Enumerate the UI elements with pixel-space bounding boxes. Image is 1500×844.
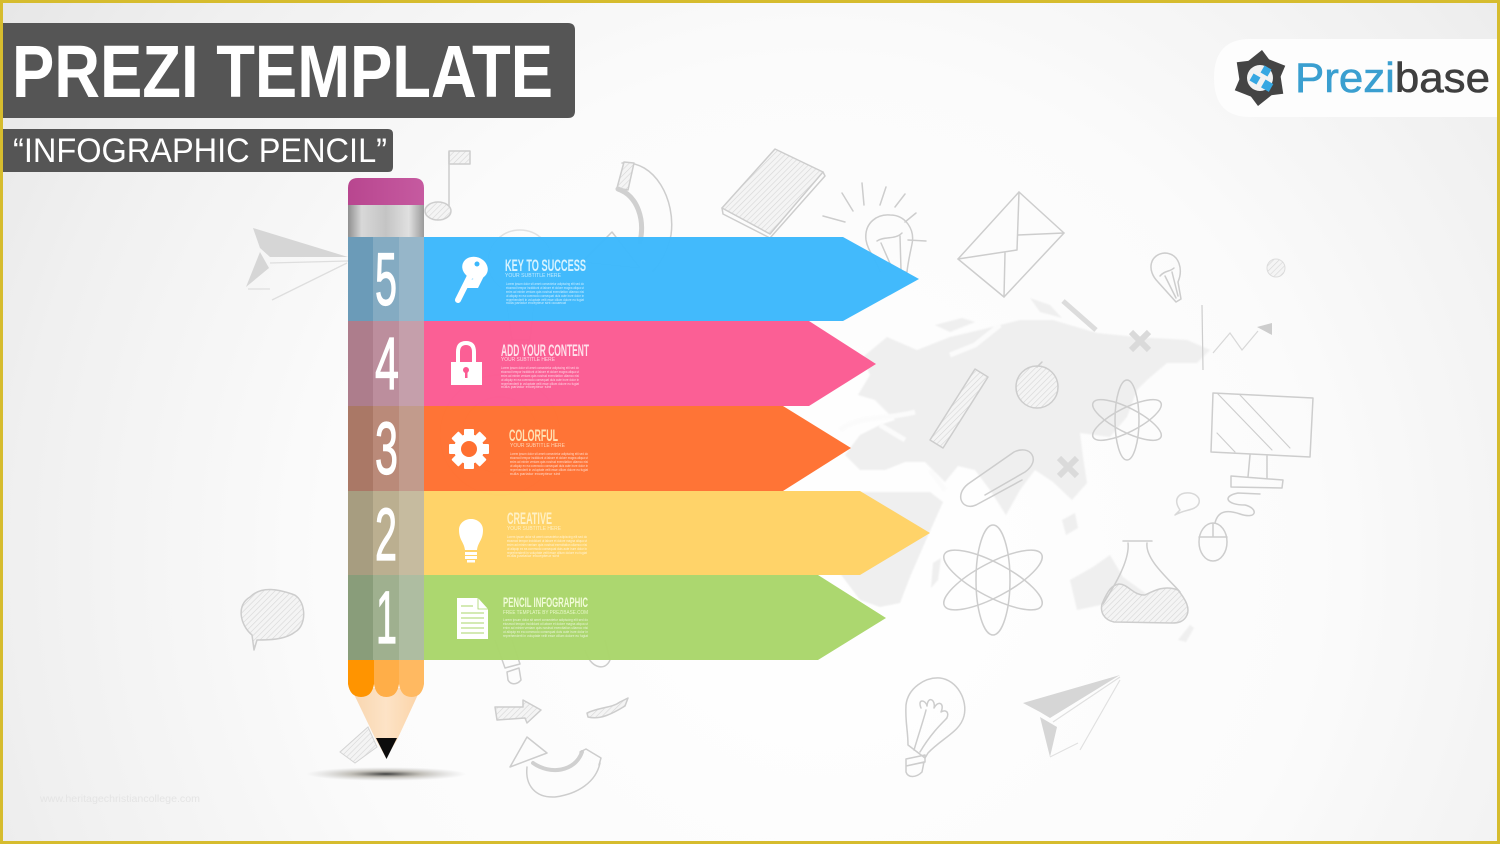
doodle: curved arrow bottom [510, 737, 601, 797]
doodle: mouse and speech bubble [1175, 493, 1260, 561]
doodle: curved arrow top [582, 162, 672, 272]
number 3: 3 [375, 407, 398, 490]
doodle: sketched lightbulb with rays [823, 183, 926, 272]
ribbon 3: colorful [424, 406, 851, 491]
title banner: PREZI TEMPLATE [12, 30, 553, 113]
doodle: large lightbulb [906, 678, 965, 776]
logo mark [1229, 50, 1291, 106]
icon: padlock [451, 343, 482, 385]
logo wordmark: Prezibase [1295, 54, 1490, 101]
ribbon 4: add your content [424, 321, 876, 406]
text block: key to success: nulla pariatur excepteur sint occaecat [506, 301, 566, 305]
pencil eraser [348, 178, 424, 205]
text block: key to success: enim ad minim veniam quis nostrud exercitation ullamco nisi [506, 290, 584, 294]
text block: creative: enim ad minim veniam quis nostrud exercitation ullamco nisi [507, 543, 587, 547]
text block: add your content: ut aliquip ex ea commodo consequat duis aute irure dolor in [501, 378, 579, 382]
number 4: 4 [375, 322, 399, 405]
text block: colorful: enim ad minim veniam quis nostrud exercitation ullamco nisi [510, 460, 588, 464]
icon: lightbulb [459, 519, 483, 562]
text: ADD YOUR CONTENT [501, 341, 589, 360]
text block: colorful: Lorem ipsum dolor sit amet consectetur adipiscing elit sed do [510, 452, 588, 456]
text block: colorful: YOUR SUBTITLE HERE [510, 443, 566, 449]
arrow ribbons [424, 237, 930, 660]
doodle: x marks [1059, 332, 1149, 476]
doodle: tiny apple [1267, 259, 1285, 277]
icon: document [457, 598, 488, 639]
text block: creative: YOUR SUBTITLE HERE [507, 526, 562, 532]
world map [800, 298, 1210, 642]
subtitle banner: “INFOGRAPHIC PENCIL” [13, 132, 387, 170]
doodle: flask [1102, 541, 1188, 623]
logo pill [1214, 39, 1500, 117]
text block: colorful: nulla pariatur excepteur sint [510, 472, 560, 476]
doodle: envelope [958, 192, 1064, 297]
ribbon 2: creative [424, 491, 930, 575]
text block: pencil infographic: enim ad minim veniam quis nostrud exercitation ullamco nisi [503, 626, 588, 630]
text block: creative: CREATIVE [507, 509, 552, 528]
text block: add your content: eiusmod tempor incididunt ut labore et dolore magna aliqua ut [501, 370, 579, 374]
doodle: sketches behind the ribbons [440, 230, 560, 495]
icon: gear [449, 429, 489, 469]
text block: key to success [505, 256, 586, 305]
doodle: apple [1016, 362, 1058, 408]
text block: pencil infographic [503, 594, 588, 638]
pencil band 1 [348, 575, 424, 660]
text block: creative: Lorem ipsum dolor sit amet consectetur adipiscing elit sed do [507, 535, 587, 539]
doodle: paperclip [961, 450, 1033, 506]
text block: colorful: ut aliquip ex ea commodo consequat duis aute irure dolor in [510, 464, 588, 468]
doodle: ruler [930, 369, 988, 448]
text block: pencil infographic: FREE TEMPLATE BY PREZIBASE.COM [503, 610, 588, 616]
text block: add your content: Lorem ipsum dolor sit amet consectetur adipiscing elit sed do [501, 366, 579, 370]
text block: key to success: KEY TO SUCCESS [505, 256, 586, 275]
text block: key to success: ut aliquip ex ea commodo consequat duis aute irure dolor in [506, 294, 584, 298]
text block: pencil infographic: Lorem ipsum dolor sit amet consectetur adipiscing elit sed do [503, 618, 588, 622]
doodle: monitor [1211, 393, 1313, 488]
pencil scalloped collar [348, 660, 424, 697]
pencil band 4 [348, 321, 424, 406]
ribbon 5: key to success [424, 237, 919, 321]
text block: colorful: reprehenderit in voluptate velit esse cillum dolore eu fugiat [510, 468, 588, 472]
doodle: right paper plane [1023, 675, 1120, 757]
doodle: book [722, 149, 825, 238]
doodle: sketch behind pencil tip [340, 727, 377, 763]
doodle: music note [425, 151, 470, 220]
text block: creative: eiusmod tempor incididunt ut labore et dolore magna aliqua ut [507, 539, 587, 543]
doodle: left paper plane [246, 228, 348, 300]
doodle: small lightbulb [1151, 253, 1181, 302]
doodle: sketched arrow [495, 700, 541, 723]
doodle: lightbulbs under green ribbon [495, 640, 610, 684]
number 2: 2 [375, 493, 397, 576]
text block: colorful: COLORFUL [509, 426, 558, 445]
text block: creative: ut aliquip ex ea commodo consequat duis aute irure dolor in [507, 547, 587, 551]
text block: pencil infographic: PENCIL INFOGRAPHIC [503, 594, 588, 610]
text block: add your content [501, 341, 589, 389]
text block: add your content: YOUR SUBTITLE HERE [501, 357, 556, 363]
doodle: small atom [1088, 380, 1166, 460]
doodle: pencil sketch [1063, 301, 1096, 330]
text block: add your content: reprehenderit in voluptate velit esse cillum dolore eu fugiat [501, 382, 579, 386]
pencil band 5 [348, 237, 424, 321]
pencil lead [376, 738, 397, 759]
doodle: growth chart [1202, 305, 1272, 370]
text block: creative: nulla pariatur excepteur sint [507, 554, 559, 558]
text block: key to success: eiusmod tempor incididunt ut labore et dolore magna aliqua ut [506, 286, 584, 290]
pencil band 3 [348, 406, 424, 491]
ribbon 1: pencil infographic [424, 575, 886, 660]
text block: add your content: enim ad minim veniam quis nostrud exercitation ullamco nisi [501, 374, 579, 378]
text block: pencil infographic: reprehenderit in voluptate velit esse cillum dolore eu fugiat [503, 634, 588, 638]
doodle: large atom [936, 525, 1050, 635]
text block: creative: reprehenderit in voluptate velit esse cillum dolore eu fugiat [507, 551, 587, 555]
number 5: 5 [375, 238, 397, 321]
text block: pencil infographic: eiusmod tempor incididunt ut labore et dolore magna aliqua ut [503, 622, 588, 626]
text block: creative [507, 509, 587, 558]
icon: key [458, 253, 491, 300]
text block: colorful: eiusmod tempor incididunt ut labore et dolore magna aliqua ut [510, 456, 588, 460]
pencil shadow [306, 767, 466, 781]
text block: key to success: Lorem ipsum dolor sit amet consectetur adipiscing elit sed do [506, 282, 584, 286]
text block: colorful [509, 426, 588, 476]
watermark: www.heritagechristiancollege.com [39, 794, 200, 805]
pencil band 2 [348, 491, 424, 575]
logo: prezibase [1214, 39, 1500, 117]
doodle: speech cloud [241, 589, 304, 650]
text block: add your content: nulla pariatur excepteur sint [501, 385, 551, 389]
number 1: 1 [376, 576, 397, 659]
doodle: brush [587, 698, 628, 718]
pencil wood cone [351, 688, 421, 758]
text block: key to success: reprehenderit in voluptate velit esse cillum dolore eu fugiat [506, 298, 584, 302]
pencil [306, 178, 466, 781]
text block: pencil infographic: ut aliquip ex ea commodo consequat duis aute irure dolor in [503, 630, 588, 634]
text block: key to success: YOUR SUBTITLE HERE [505, 273, 562, 279]
pencil ferrule [348, 205, 424, 237]
